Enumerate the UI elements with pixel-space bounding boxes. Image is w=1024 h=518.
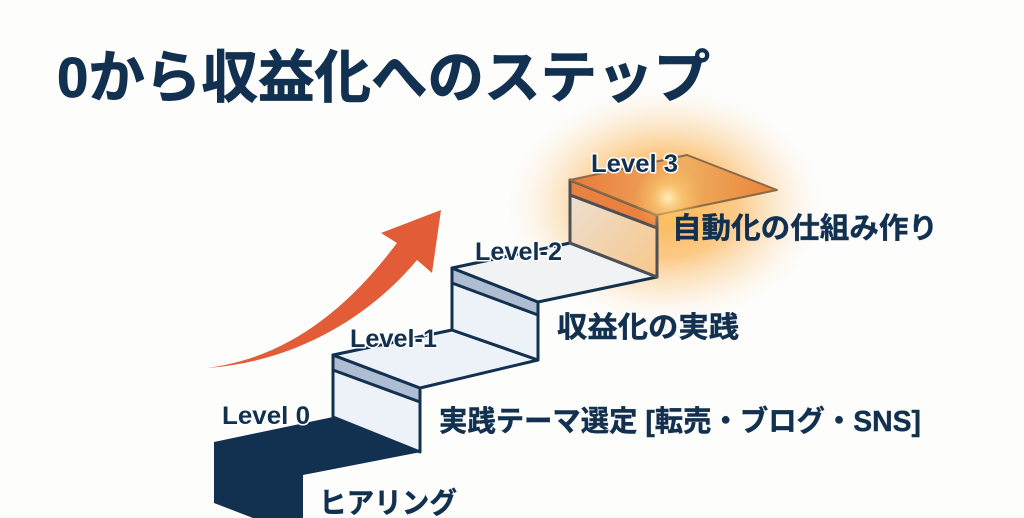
label: Level 3: Level 3 bbox=[591, 150, 678, 178]
text: automation: 自動化の仕組み作り bbox=[672, 212, 938, 245]
staircase bbox=[214, 155, 777, 518]
title: 0から収益化へのステップ bbox=[57, 46, 710, 110]
label: Level 1: Level-1 bbox=[350, 325, 437, 353]
text: monetization practice: 収益化の実践 bbox=[557, 311, 739, 344]
step: level 0 bbox=[214, 417, 421, 518]
label: Level 0: Level 0 bbox=[222, 402, 310, 430]
step: level 1 bbox=[333, 330, 538, 452]
arrow: upward growth bbox=[207, 210, 441, 368]
label: Level 2: Level-2 bbox=[475, 238, 562, 266]
glow behind top step bbox=[507, 87, 823, 323]
step: level 2 bbox=[452, 243, 657, 360]
step: level 3 bbox=[570, 155, 777, 277]
highlight on top step bbox=[634, 164, 702, 232]
text: theme selection: 実践テーマ選定 [転売・ブログ・SNS] bbox=[439, 404, 921, 438]
